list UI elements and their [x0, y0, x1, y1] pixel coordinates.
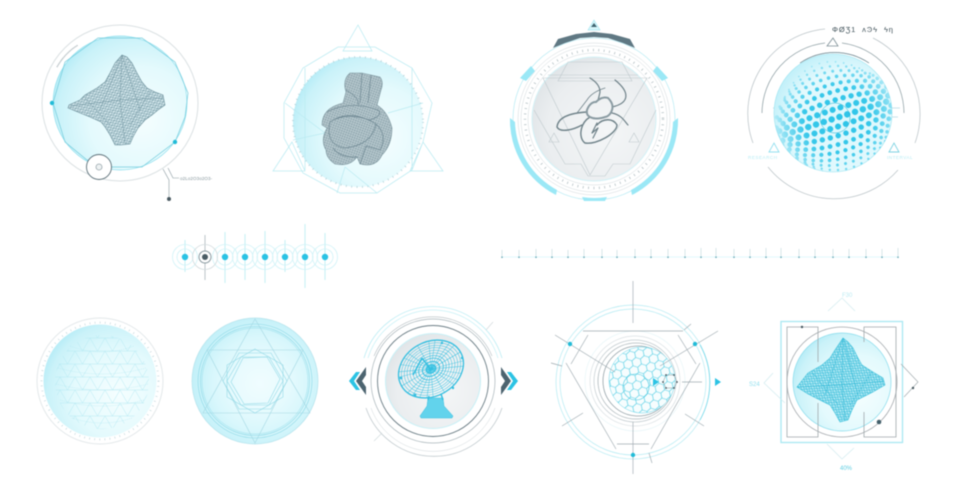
- rim dots: [400, 342, 463, 396]
- label left: S24: [749, 382, 760, 388]
- right triangle: [889, 143, 899, 152]
- top triangle: [588, 20, 600, 30]
- left label: RESEARCH: [748, 155, 778, 160]
- arrow markers: [653, 378, 721, 386]
- left chevrons: [349, 367, 366, 395]
- panel: halftone sphere: [748, 25, 920, 199]
- globe disc: [53, 36, 187, 170]
- dotted hexagon: [662, 374, 678, 389]
- small label: o2Lo2O3o2O3-: [180, 176, 213, 181]
- tick ring: [293, 57, 423, 187]
- frame lines: [551, 281, 718, 474]
- left triangle: [769, 143, 779, 152]
- leader dot: [167, 197, 171, 201]
- top dark arc: [553, 32, 635, 48]
- leader line: [163, 168, 179, 199]
- panel: hexagram disc: [192, 318, 318, 444]
- tick arc: [57, 45, 78, 67]
- gray concentric rings: [585, 331, 685, 431]
- dot left: [50, 101, 54, 105]
- mountain mesh: [67, 54, 166, 146]
- heart disc: [293, 57, 423, 187]
- lens rings: [513, 38, 675, 200]
- pulse dots: [182, 254, 328, 260]
- dot right: [173, 140, 177, 144]
- right chevrons: [501, 367, 518, 395]
- panel: cyan mountain frame: [749, 293, 918, 472]
- panel: mountain wireframe globe: [42, 25, 213, 201]
- lens rings: [364, 307, 502, 456]
- gray ring: [787, 327, 897, 437]
- dark pulse: [192, 235, 218, 280]
- label top: F30: [842, 293, 853, 299]
- right label: INTERVAL: [887, 155, 913, 160]
- diamond corners: [764, 298, 855, 459]
- sphere disc: [44, 324, 156, 438]
- rings: [198, 324, 312, 438]
- top triangle: [827, 38, 838, 46]
- hexagram base: [192, 318, 318, 444]
- brittle star: [557, 78, 628, 143]
- top label: ΦØƷ1 ᴧϿϟ ϟη: [832, 25, 894, 34]
- center ring: [820, 103, 850, 133]
- inner frame lines: [534, 62, 656, 176]
- lens disc: [386, 334, 480, 428]
- label bottom: 40%: [840, 466, 853, 472]
- cyan square: [781, 322, 902, 442]
- target knob: [86, 154, 112, 180]
- tick ruler: [502, 248, 898, 258]
- triangles and polygon frame: [273, 25, 443, 193]
- panel: brittle star lens: [510, 20, 678, 201]
- mountain disc: [793, 333, 891, 431]
- heart: [322, 73, 392, 165]
- satellite dish: [388, 329, 474, 418]
- brackets: [787, 327, 896, 437]
- star triangles: [203, 319, 310, 443]
- polygon frame: [53, 38, 188, 167]
- panel: triangle mesh sphere: [37, 318, 163, 444]
- panel: heart mesh globe: [273, 25, 443, 193]
- tower: [420, 398, 453, 418]
- pulse rings: [172, 244, 338, 270]
- panel: radio telescope lens: [349, 307, 518, 456]
- orbit arcs: [748, 29, 920, 199]
- cyan bezel segments: [510, 66, 678, 201]
- halftone dots: [774, 60, 892, 172]
- tick ring: [42, 322, 158, 440]
- cyan mountain mesh: [796, 337, 886, 423]
- large dot: [877, 420, 881, 424]
- nested hexagons: [223, 349, 287, 413]
- sphere base: [774, 54, 892, 172]
- cyan nodes: [568, 342, 697, 457]
- outer rings: [556, 305, 710, 459]
- panel: pulse dots row: [172, 224, 338, 288]
- hex mesh sphere: [609, 347, 675, 413]
- pulse stems: [185, 224, 325, 288]
- triangle mesh: [55, 335, 149, 429]
- panel: hex sphere target: [551, 281, 721, 474]
- lens disc: [532, 57, 656, 181]
- small dots: [801, 326, 914, 389]
